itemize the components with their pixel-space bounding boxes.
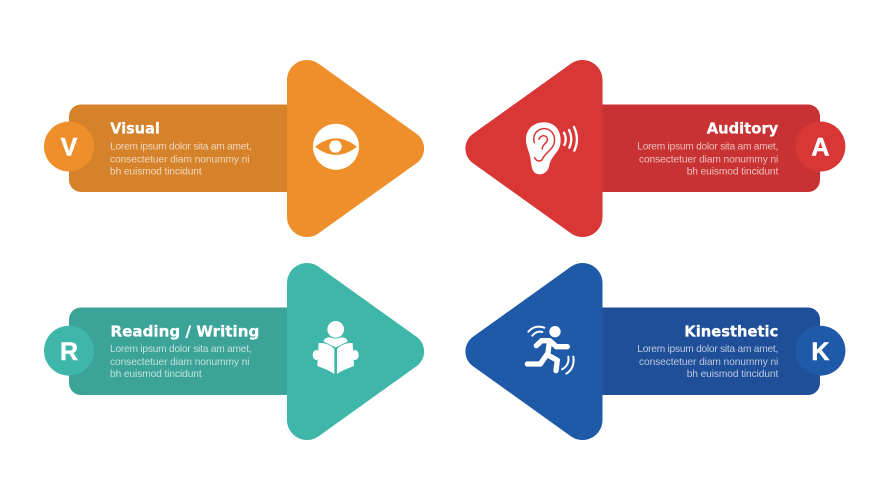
heading: Auditory: Auditory [707, 119, 778, 137]
icon: ear with sound waves [526, 122, 577, 174]
text block: Reading / Writing description [110, 344, 252, 380]
icon: running person with motion lines [527, 326, 574, 374]
triangle: Reading / Writing [287, 263, 424, 440]
badge: A: A [811, 134, 829, 162]
text block: Visual description: bh euismod tincidunt [110, 166, 202, 178]
text block: Visual description: Lorem ipsum dolor sita am amet, [110, 141, 252, 152]
triangle: Visual [287, 60, 424, 237]
bar: Visual [69, 104, 288, 192]
bar: Auditory [601, 104, 820, 192]
text block: Reading / Writing description: bh euismod tincidunt [110, 369, 202, 380]
icon: eye [313, 124, 359, 170]
badge: A [795, 122, 845, 172]
text block: Auditory description: bh euismod tincidunt [687, 166, 778, 178]
heading: Reading / Writing: Reading / Writing [110, 323, 259, 341]
text block: Visual description: consectetuer diam nonummy ni [110, 154, 250, 165]
text block: Kinesthetic description: bh euismod tincidunt [687, 369, 778, 380]
heading: Kinesthetic: Kinesthetic [684, 323, 778, 341]
badge: K: K [811, 338, 829, 366]
badge: K [795, 326, 845, 376]
bar: Reading / Writing [69, 308, 288, 395]
text block: Visual description [110, 141, 252, 178]
panel: Auditory arrow [465, 60, 845, 237]
bar: Kinesthetic [601, 308, 820, 395]
badge: V [44, 122, 94, 172]
text block: Auditory description [637, 141, 778, 178]
triangle: Auditory [465, 60, 603, 237]
badge: R: R [60, 338, 78, 366]
panel: Reading / Writing arrow [44, 263, 424, 440]
triangle: Kinesthetic [465, 263, 603, 440]
icon: person reading a book [313, 321, 359, 374]
text block: Auditory description: Lorem ipsum dolor sita am amet, [637, 141, 778, 152]
panel: Visual arrow [44, 60, 424, 237]
text block: Reading / Writing description: Lorem ipsum dolor sita am amet, [110, 344, 252, 355]
text block: Auditory description: consectetuer diam nonummy ni [639, 154, 778, 165]
heading: Visual: Visual [110, 119, 160, 137]
text block: Kinesthetic description: consectetuer diam nonummy ni [639, 357, 778, 368]
panel: Kinesthetic arrow [465, 263, 845, 440]
badge: V: V [61, 133, 78, 161]
text block: Kinesthetic description: Lorem ipsum dolor sita am amet, [637, 344, 778, 355]
text block: Kinesthetic description [637, 344, 778, 380]
badge: R [44, 326, 94, 376]
text block: Reading / Writing description: consectetuer diam nonummy ni [110, 357, 250, 368]
